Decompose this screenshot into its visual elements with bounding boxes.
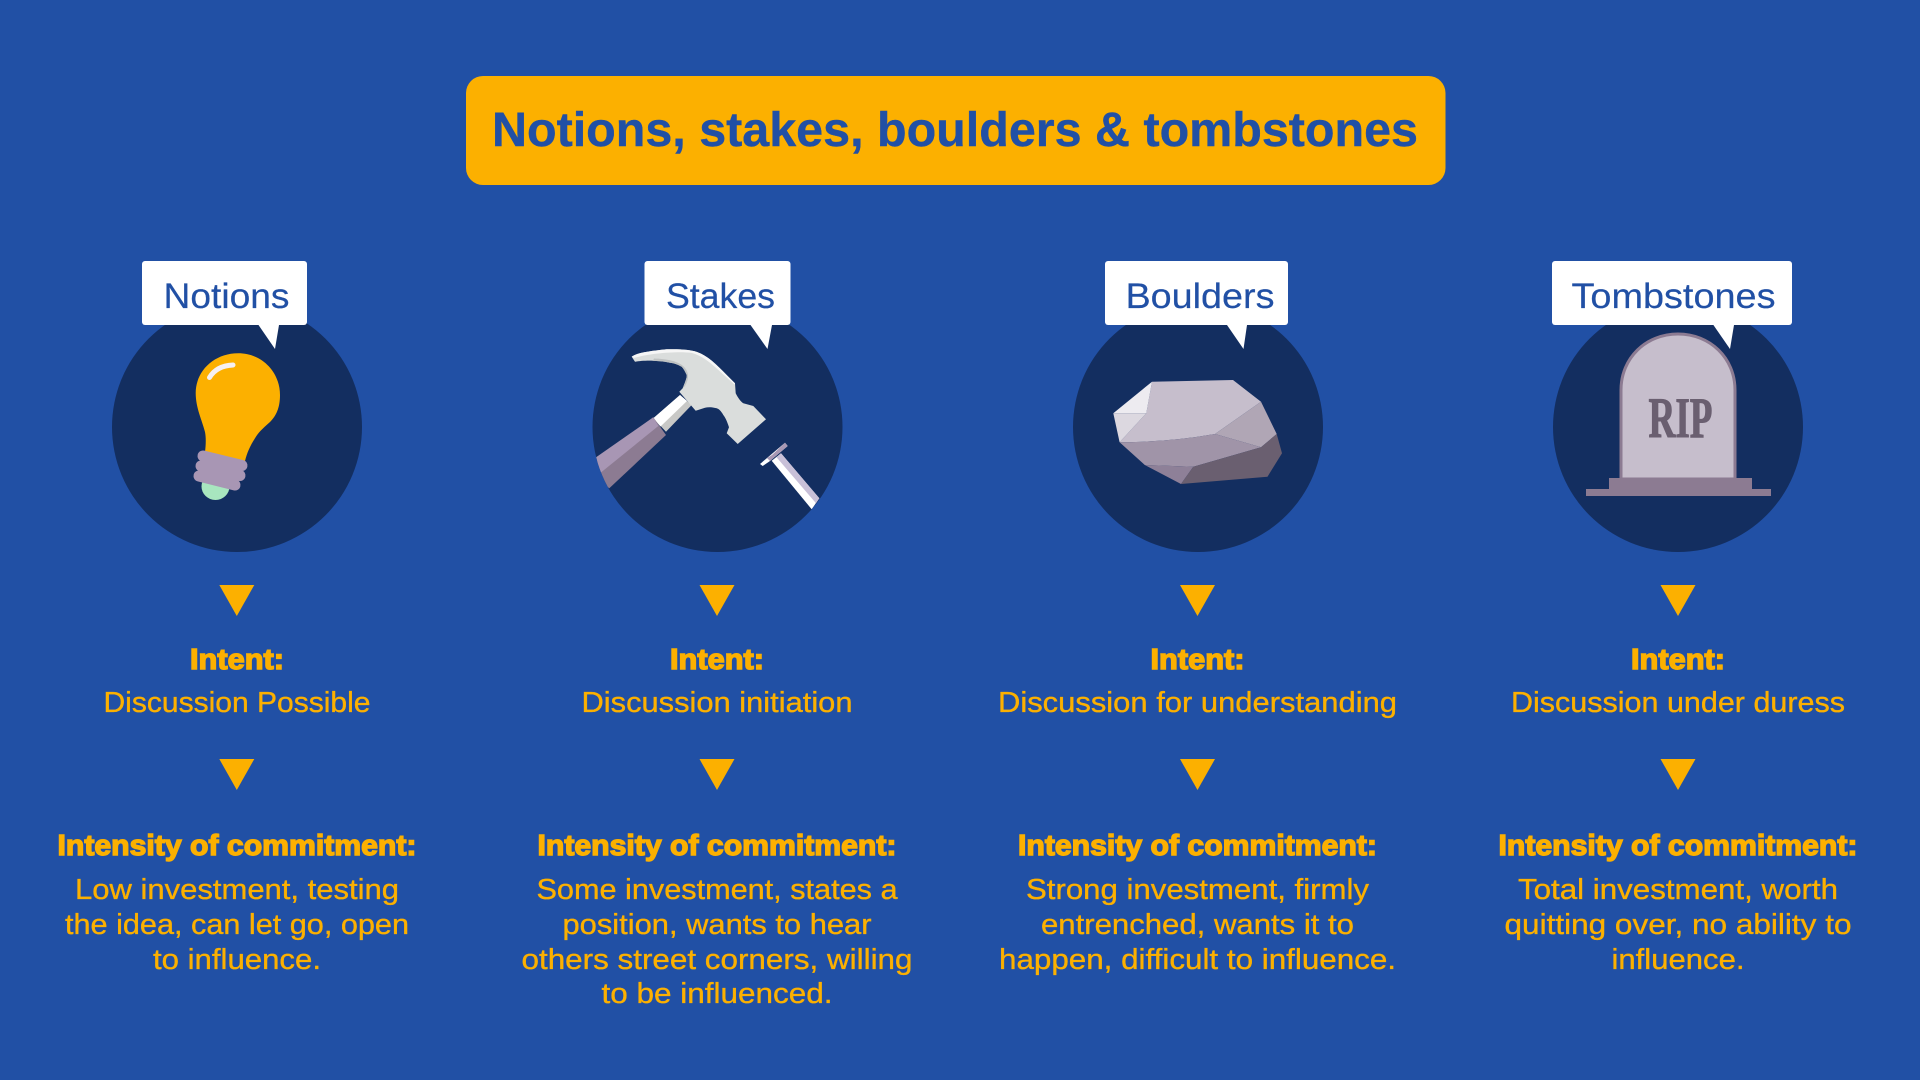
speech label: tombstones <box>1552 261 1792 349</box>
speech label: tombstones: Tombstones <box>1572 277 1776 316</box>
intent text: Discussion initiation <box>582 687 852 719</box>
commitment text <box>999 830 1396 976</box>
panel: boulders <box>998 261 1397 976</box>
circle: notions <box>112 302 362 552</box>
commitment text: quitting over, no ability to <box>1504 909 1852 941</box>
commitment text: Total investment, worth <box>1518 874 1838 906</box>
intent text: Intent: <box>1631 644 1725 676</box>
commitment text: the idea, can let go, open <box>65 909 409 941</box>
intent text: Intent: <box>670 644 764 676</box>
intent text <box>582 644 852 719</box>
intent text: Intent: <box>1150 644 1244 676</box>
commitment text: position, wants to hear <box>562 909 872 941</box>
speech label: stakes: Stakes <box>666 277 775 316</box>
commitment text: others street corners, willing <box>522 944 912 976</box>
intent text <box>998 644 1397 719</box>
commitment text: Low investment, testing <box>75 874 399 906</box>
circle: tombstones <box>1553 302 1803 552</box>
commitment text: Intensity of commitment: <box>58 830 416 862</box>
arrow <box>219 585 254 616</box>
commitment text: Strong investment, firmly <box>1026 874 1370 906</box>
arrow <box>700 759 734 790</box>
commitment text: influence. <box>1612 944 1744 976</box>
commitment text: to be influenced. <box>602 978 832 1010</box>
commitment text: Intensity of commitment: <box>1498 830 1858 862</box>
icon: hammer and nail <box>585 349 819 509</box>
title <box>466 76 1446 185</box>
speech label: boulders: Boulders <box>1126 277 1274 316</box>
icon: tombstone: RIP <box>1648 387 1712 450</box>
speech label: notions: Notions <box>164 277 290 316</box>
arrow <box>700 585 734 616</box>
circle: stakes <box>592 302 842 552</box>
panel: stakes <box>522 261 912 1010</box>
icon: light bulb <box>196 353 280 500</box>
intent text: Discussion for understanding <box>998 687 1397 719</box>
commitment text: Some investment, states a <box>536 874 898 906</box>
commitment text: to influence. <box>153 944 321 976</box>
circle: boulders <box>1073 302 1323 552</box>
panel: tombstones <box>1498 261 1858 976</box>
speech label: notions <box>142 261 307 349</box>
commitment text: happen, difficult to influence. <box>999 944 1396 976</box>
speech label: boulders <box>1105 261 1288 349</box>
arrow <box>1660 759 1696 790</box>
intent text <box>104 644 370 719</box>
commitment text: Intensity of commitment: <box>538 830 896 862</box>
icon: boulder <box>1113 380 1282 484</box>
commitment text: Intensity of commitment: <box>1018 830 1377 862</box>
commitment text <box>58 830 416 976</box>
commitment text: entrenched, wants it to <box>1041 909 1354 941</box>
intent text: Discussion Possible <box>104 687 370 719</box>
arrow <box>219 759 254 790</box>
arrow <box>1660 585 1696 616</box>
intent text <box>1511 644 1845 719</box>
arrow <box>1180 585 1215 616</box>
panel: notions <box>58 261 416 976</box>
arrow <box>1180 759 1215 790</box>
commitment text <box>522 830 912 1010</box>
speech label: stakes <box>644 261 790 349</box>
commitment text <box>1498 830 1858 976</box>
title: Notions, stakes, boulders & tombstones <box>492 104 1418 157</box>
icon: tombstone <box>1586 334 1771 496</box>
intent text: Discussion under duress <box>1511 687 1845 719</box>
intent text: Intent: <box>190 644 284 676</box>
